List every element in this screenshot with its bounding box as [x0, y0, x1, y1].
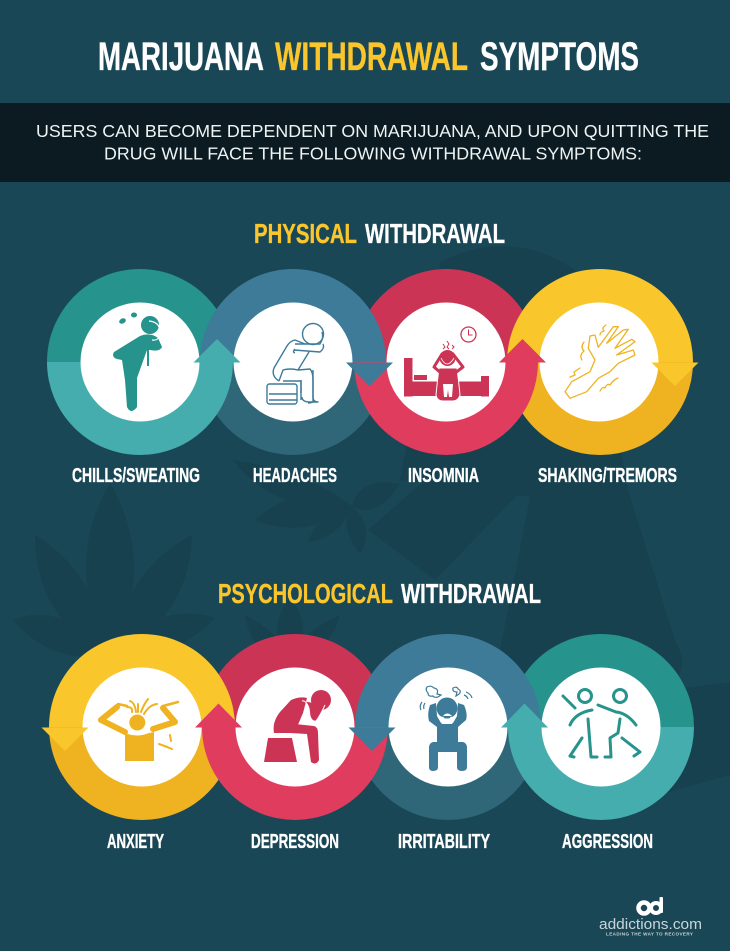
- symptom: insomnia: INSOMNIA: [408, 465, 479, 487]
- title: SYMPTOMS: [480, 35, 639, 79]
- logo: addictions.com: LEADING THE WAY TO RECOVERY: [606, 932, 693, 936]
- symptom: anxiety: ANXIETY: [107, 831, 164, 853]
- title: WITHDRAWAL: [275, 35, 468, 79]
- arrow: insomnia up: [499, 339, 546, 362]
- heading: physical withdrawal: WITHDRAWAL: [365, 218, 505, 249]
- heading: psychological withdrawal: PSYCHOLOGICAL: [218, 578, 393, 609]
- symptom: shaking/tremors: SHAKING/TREMORS: [538, 465, 677, 487]
- ring bands: psychological row: [49, 634, 694, 820]
- symptom: depression: DEPRESSION: [251, 831, 339, 853]
- icon: person sweating: [113, 312, 162, 411]
- heading: psychological withdrawal: WITHDRAWAL: [401, 578, 541, 609]
- symptom: aggression: AGGRESSION: [562, 831, 653, 853]
- symptom: anxiety: [82, 668, 202, 853]
- icon: shaking hand: [565, 325, 635, 398]
- icon: depressed person seated: [264, 690, 331, 764]
- arrow: chills up: [194, 339, 240, 362]
- arrow: aggression up: [501, 704, 548, 728]
- icon: two people fighting: [563, 690, 640, 757]
- symptom: aggression: [542, 668, 660, 853]
- heading: physical withdrawal: PHYSICAL: [254, 218, 357, 249]
- symptom: chills/sweating: CHILLS/SWEATING: [72, 465, 200, 487]
- title: MARIJUANA: [98, 35, 264, 79]
- symptom: insomnia: [386, 302, 506, 487]
- arrow: depression up: [195, 704, 242, 728]
- symptom: depression: [236, 668, 354, 853]
- heading: physical withdrawal: [254, 218, 505, 249]
- intro band: DRUG WILL FACE THE FOLLOWING WITHDRAWAL SYMPTOMS:: [104, 144, 642, 164]
- ring bands: physical row: [47, 269, 693, 455]
- icon: anxious person pulling hair: [101, 699, 178, 761]
- arrow: irritability down: [348, 728, 396, 751]
- title: [98, 35, 639, 79]
- symptom: headaches: HEADACHES: [253, 465, 337, 487]
- intro band: [0, 103, 730, 182]
- logo: addictions.com: [599, 897, 702, 936]
- arrow: headaches down: [346, 362, 393, 386]
- icon: ad mark: [638, 897, 663, 914]
- icon: person with headache on seat: [267, 324, 324, 404]
- intro band: USERS CAN BECOME DEPENDENT ON MARIJUANA, AND UPON QUITTING THE: [36, 121, 709, 141]
- icon: person awake on bed with clock: [404, 327, 489, 401]
- arrow: anxiety down: [42, 728, 88, 751]
- arrow: shaking down: [652, 362, 698, 386]
- icon: irritated person with steam: [420, 686, 472, 771]
- symptom: headaches: [234, 302, 352, 487]
- logo: addictions.com: addictions.com: [599, 917, 702, 933]
- symptom: shaking/tremors: [538, 302, 677, 487]
- symptom: chills/sweating: [72, 302, 200, 487]
- symptom: irritability: IRRITABILITY: [398, 831, 490, 853]
- symptom: irritability: [388, 668, 508, 853]
